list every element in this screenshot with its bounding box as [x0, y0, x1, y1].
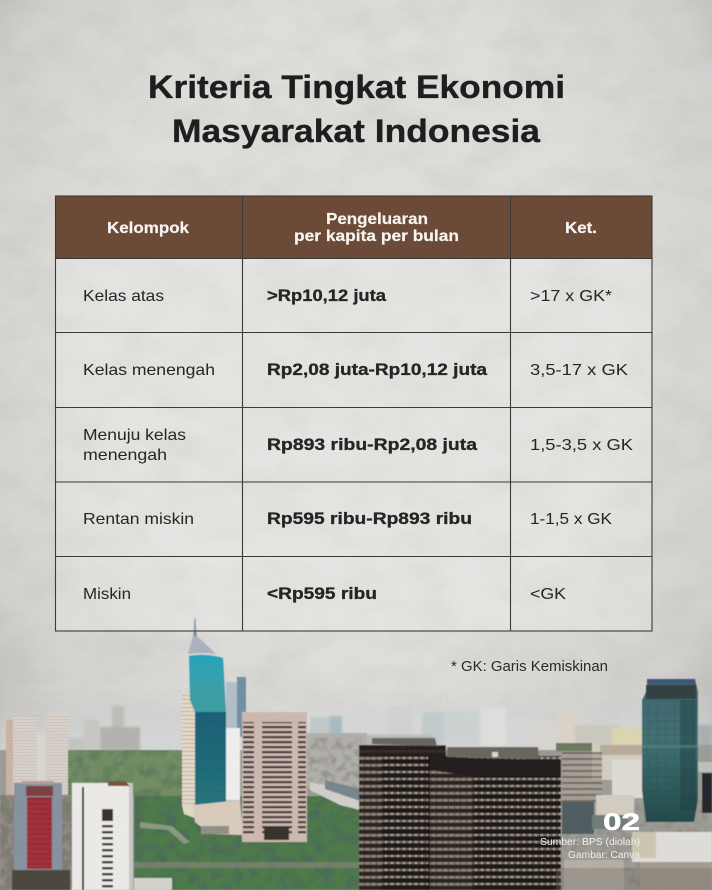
table grid lines [55, 196, 652, 631]
mid-ground city [0, 750, 712, 890]
dark tower one [359, 738, 446, 890]
row: kelas atas [83, 287, 612, 305]
row: menuju kelas menengah: Menuju kelas [83, 427, 186, 444]
source credit [540, 836, 640, 861]
glass tower right [642, 679, 698, 822]
bottom fade [556, 868, 712, 890]
park [66, 750, 184, 796]
footnote: * GK: Garis Kemiskinan [451, 659, 608, 675]
row: kelas menengah: 3,5-17 x GK [530, 362, 628, 379]
row: miskin: <GK [530, 586, 566, 603]
table header [55, 196, 652, 258]
row: kelas atas: >Rp10,12 juta [267, 287, 387, 305]
row: rentan miskin: Rentan miskin [83, 511, 194, 528]
source credit: Sumber: BPS (diolah) [540, 836, 640, 848]
row: miskin: <Rp595 ribu [267, 585, 377, 603]
row: miskin [83, 585, 566, 603]
hazy horizon [0, 680, 712, 890]
dark tower two [428, 747, 561, 890]
right side low buildings [560, 745, 712, 890]
row: rentan miskin: Rp595 ribu-Rp893 ribu [267, 510, 472, 528]
row: menuju kelas menengah: 1,5-3,5 x GK [530, 437, 633, 454]
back blue tower [226, 677, 246, 802]
railway building [310, 782, 360, 810]
row: menuju kelas menengah: menengah [83, 447, 167, 464]
wisma tower [182, 618, 226, 820]
city skyline photo [0, 618, 712, 890]
title [148, 69, 565, 149]
table header: Kelompok [107, 220, 189, 237]
photo grain [0, 690, 712, 890]
row: rentan miskin [83, 510, 612, 528]
table header: per kapita per bulan [294, 228, 459, 245]
table header: Pengeluaran [326, 211, 428, 228]
red building [14, 781, 62, 871]
row: kelas menengah: Rp2,08 juta-Rp10,12 juta [267, 361, 488, 379]
title: Kriteria Tingkat Ekonomi [148, 69, 565, 105]
striped cream tower [242, 712, 307, 842]
title: Masyarakat Indonesia [172, 113, 540, 149]
table body tint [55, 258, 652, 631]
row: menuju kelas menengah [83, 427, 633, 464]
white foreground building [72, 781, 133, 890]
row: kelas atas: >17 x GK* [530, 288, 612, 305]
row: menuju kelas menengah: Rp893 ribu-Rp2,08 juta [267, 436, 478, 454]
table [55, 196, 652, 631]
source credit: Gambar: Canva [568, 849, 640, 861]
row: kelas menengah [83, 361, 628, 379]
row: miskin: Miskin [83, 586, 131, 603]
left ground [0, 795, 72, 890]
ground trees [134, 796, 360, 890]
distant buildings [68, 706, 712, 766]
table header: Ket. [565, 220, 597, 237]
page number: 02 [603, 809, 640, 836]
row: kelas menengah: Kelas menengah [83, 362, 215, 379]
left twin towers [6, 714, 68, 798]
podium [193, 800, 243, 835]
row: kelas atas: Kelas atas [83, 288, 164, 305]
row: rentan miskin: 1-1,5 x GK [530, 511, 612, 528]
